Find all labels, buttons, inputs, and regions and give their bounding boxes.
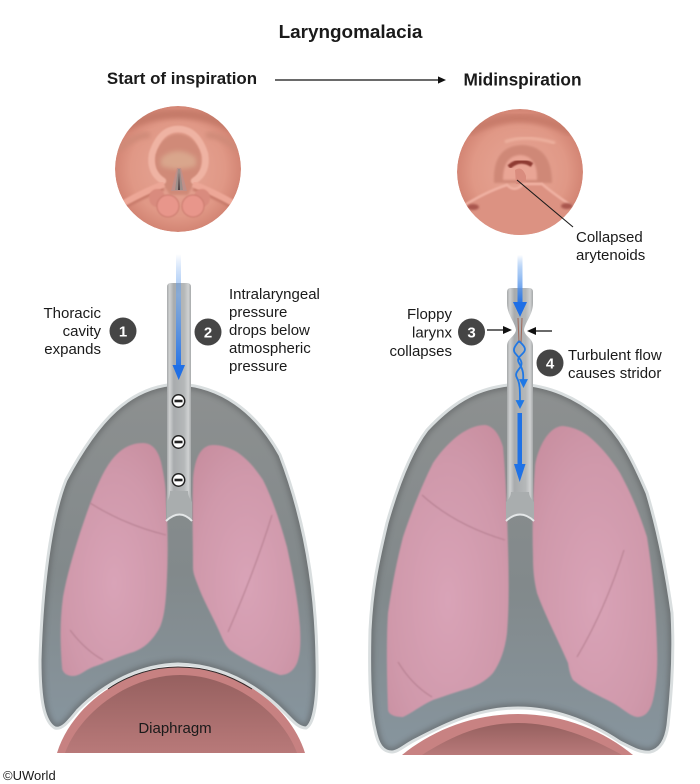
arrow: start to midinspiration xyxy=(275,76,446,84)
step 4 label: causes stridor xyxy=(568,365,661,382)
step 4 label: Turbulent flow xyxy=(568,347,662,364)
step 2 label: Intralaryngeal xyxy=(229,286,320,303)
turbulent flow xyxy=(514,341,526,407)
label: diaphragm: Diaphragm xyxy=(138,720,212,737)
compression arrow left xyxy=(487,326,512,334)
trachea right with collapse xyxy=(506,288,534,521)
right lung, mid xyxy=(533,426,657,717)
step 2 label: pressure xyxy=(229,358,287,375)
copyright: ©UWorld xyxy=(3,768,56,783)
step 4 badge: 4 xyxy=(546,356,555,372)
step 2 badge xyxy=(194,318,222,346)
diaphragm left xyxy=(57,667,305,753)
left lung, start xyxy=(61,443,168,676)
heading: midinspiration: Midinspiration xyxy=(463,70,582,90)
step 2 label: drops below xyxy=(229,322,310,339)
step 4 badge xyxy=(536,350,564,376)
trachea left xyxy=(166,283,192,521)
airflow arrow top xyxy=(513,255,527,317)
right chest diagram xyxy=(370,255,673,755)
step 3 label: collapses xyxy=(389,343,452,360)
step 1 label: expands xyxy=(44,341,101,358)
diaphragm right xyxy=(402,714,633,755)
label: collapsed arytenoids: arytenoids xyxy=(576,247,645,264)
step 2 label: pressure xyxy=(229,304,287,321)
step 3 badge xyxy=(458,318,485,346)
thoracic cavity left xyxy=(40,384,317,728)
compression arrow right xyxy=(527,327,552,335)
airflow arrow lower xyxy=(514,413,526,482)
step 3 label: Floppy xyxy=(407,306,452,323)
step 2 label: atmospheric xyxy=(229,340,311,357)
left chest diagram xyxy=(40,254,317,753)
heading: start of inspiration: Start of inspiration xyxy=(107,69,257,88)
step 3 label: larynx xyxy=(412,324,452,342)
left lung, mid xyxy=(387,425,509,717)
title: Laryngomalacia xyxy=(279,22,423,43)
step 3 badge: 3 xyxy=(467,324,476,342)
leader line: collapsed arytenoids xyxy=(517,180,573,227)
step 2 badge: 2 xyxy=(204,324,212,342)
thoracic cavity right xyxy=(370,384,673,752)
label: collapsed arytenoids: Collapsed xyxy=(576,229,643,246)
illustration: collapsed larynx xyxy=(457,109,583,240)
right lung, start xyxy=(193,445,300,675)
step 1 label: cavity xyxy=(63,323,101,340)
step 1 badge: 1 xyxy=(119,324,127,340)
illustration: open larynx xyxy=(115,106,241,232)
negative pressure signs xyxy=(172,395,185,486)
step 1 label: Thoracic xyxy=(43,305,101,322)
step 1 badge xyxy=(110,318,136,344)
airflow arrow left xyxy=(172,254,185,380)
